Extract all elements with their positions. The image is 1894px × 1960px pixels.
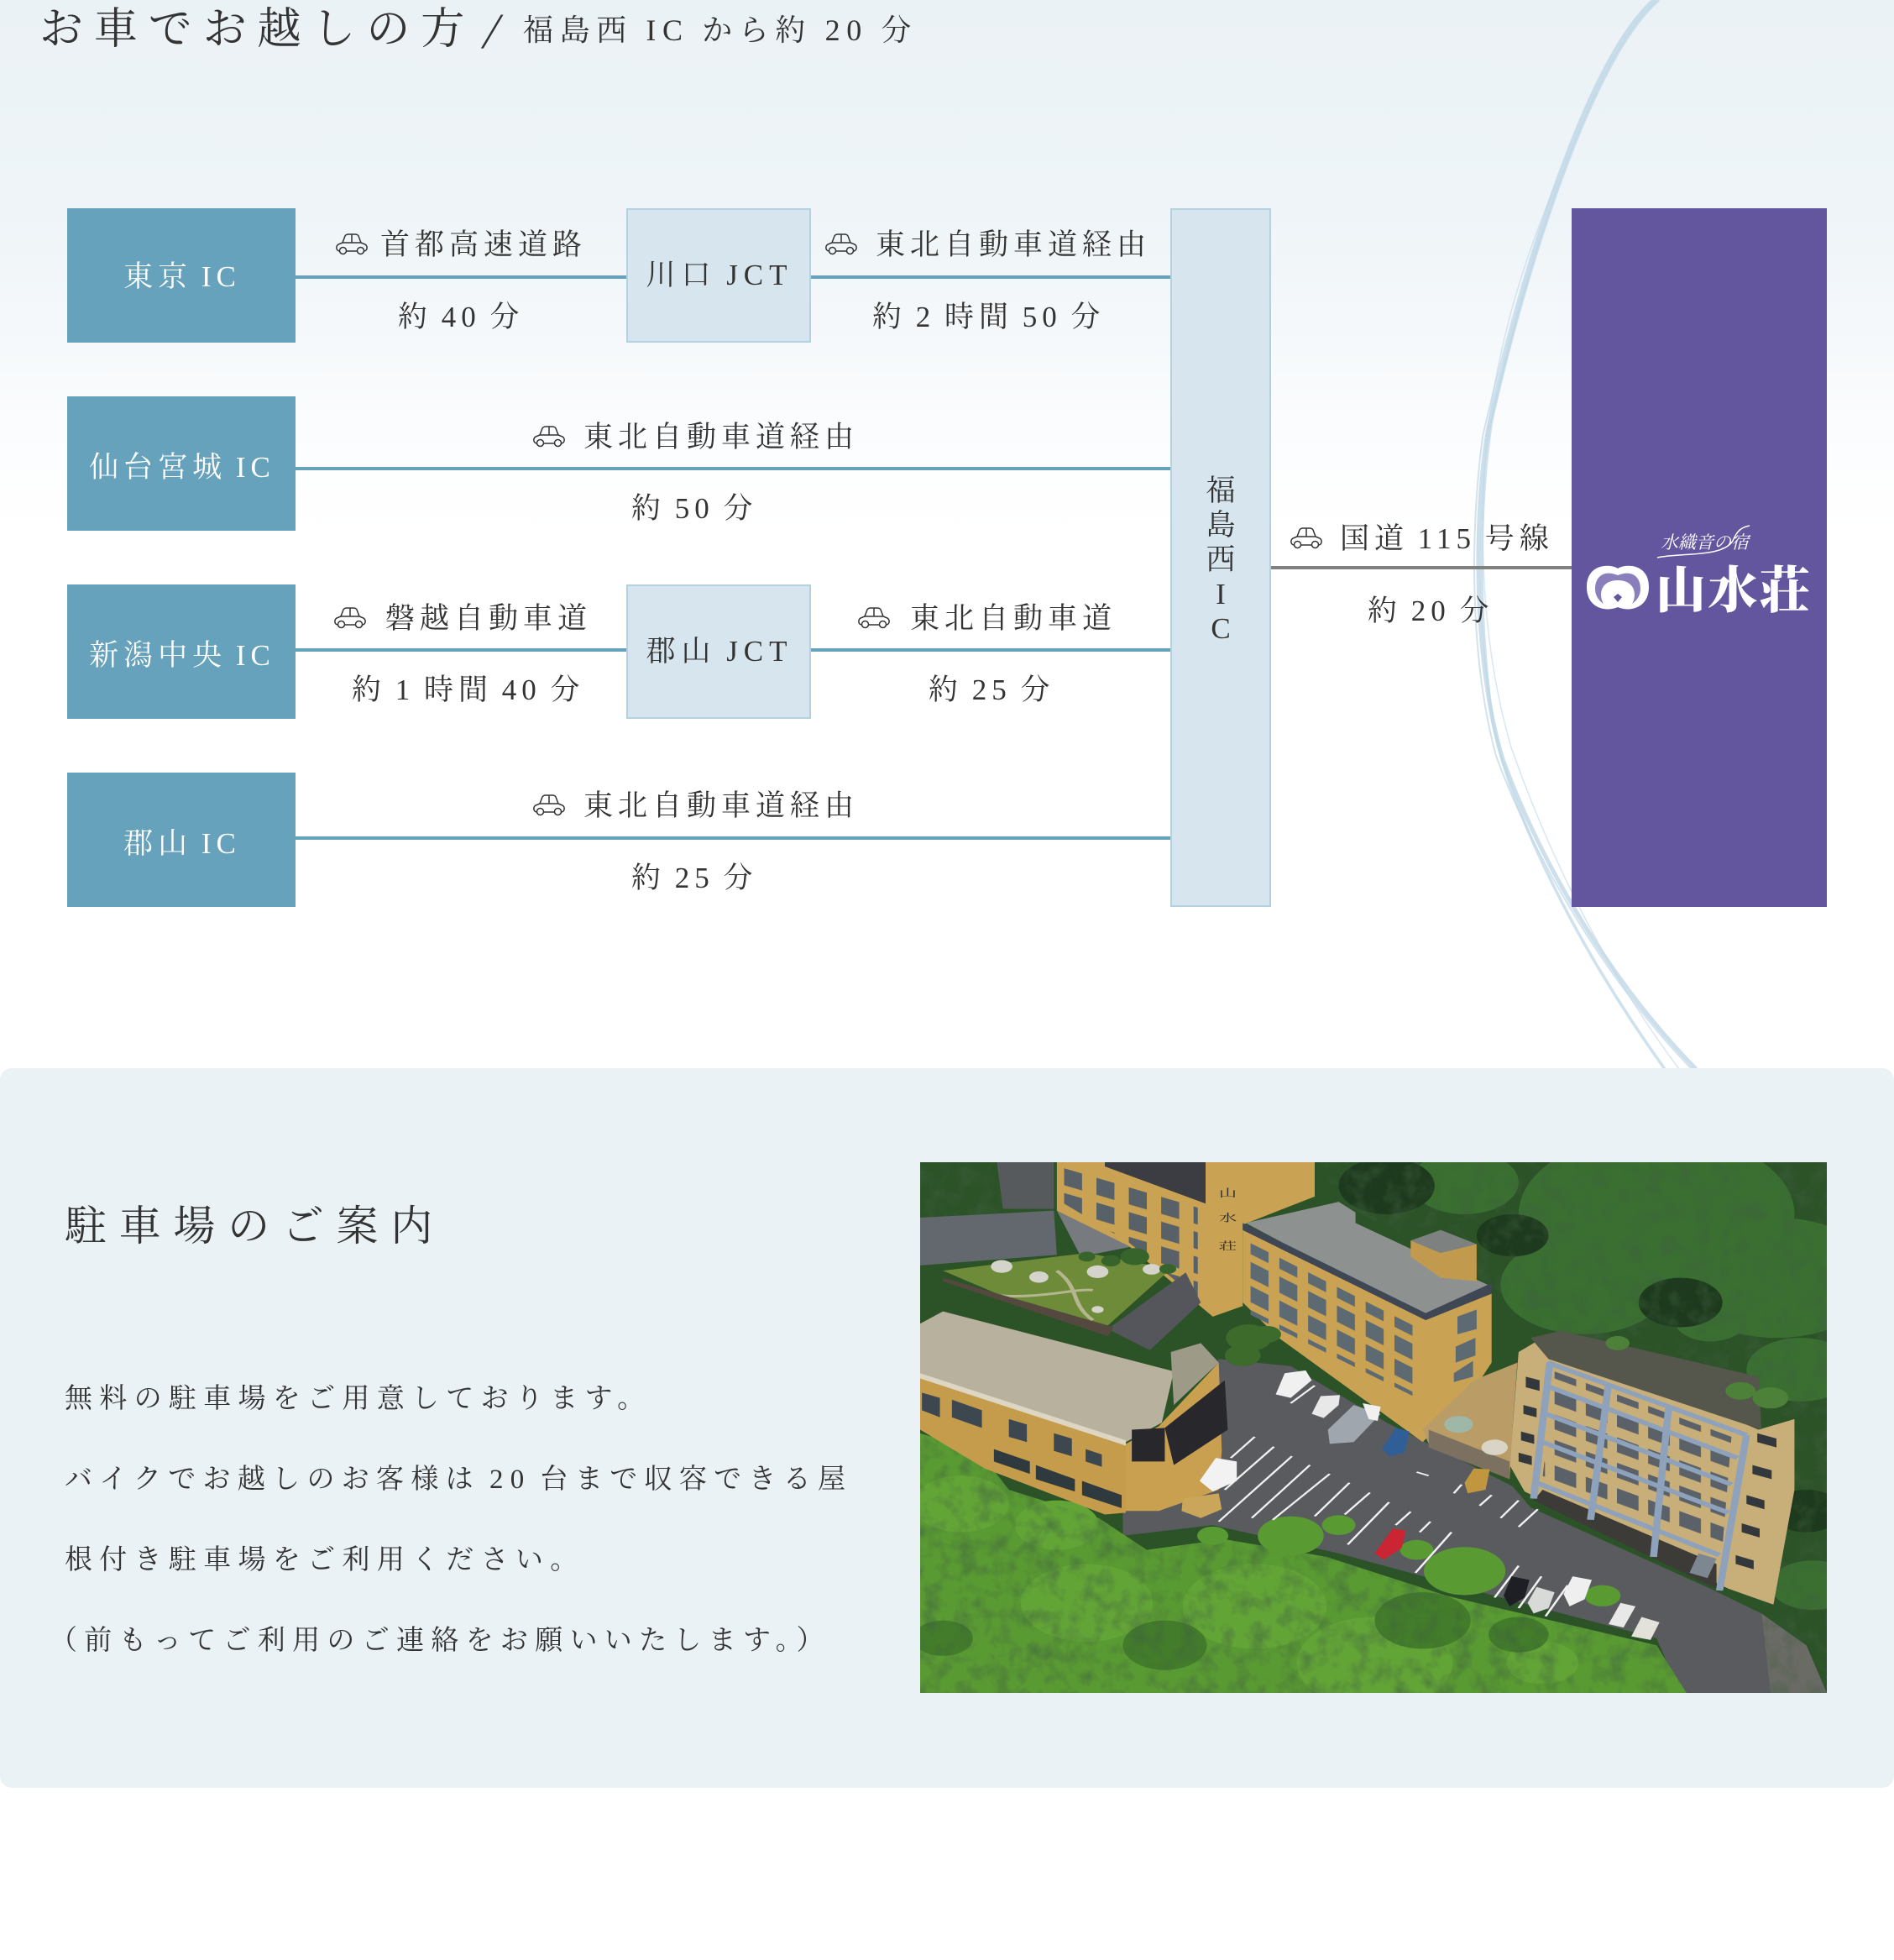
box: 郡山IC: 郡山 IC	[123, 826, 241, 860]
parking lines	[1219, 1386, 1567, 1617]
panel: parking	[0, 1068, 1894, 1788]
box: 仙台宮城IC	[67, 396, 296, 531]
forest canopy shadows	[913, 1592, 1549, 1670]
box: 福島西IC: 島	[1206, 509, 1236, 542]
rooftop garden	[943, 1248, 1176, 1325]
box: 福島西IC	[1170, 208, 1271, 907]
right building	[1509, 1331, 1794, 1605]
body text	[50, 1384, 852, 1656]
top-left small building	[997, 1162, 1054, 1209]
forest right	[1410, 1133, 1878, 1610]
decorative water ribbon curve	[1473, 0, 1698, 1068]
route: 東北自動車道: 東北自動車道	[910, 602, 1117, 635]
foliage texture	[920, 1162, 1827, 1693]
route: 国道115号線: 国道 115 号線	[1340, 522, 1554, 555]
title: お車でお越しの方	[39, 6, 475, 54]
route: 東北自動車道経由 (row 4): 東北自動車道経由	[583, 789, 859, 822]
service block	[1423, 1363, 1517, 1479]
asphalt	[1122, 1359, 1771, 1693]
route: 首都高速道路: 首都高速道路	[380, 228, 587, 261]
dark sloped roof	[1108, 1272, 1201, 1350]
box: 東京IC: 東京 IC	[123, 260, 241, 292]
photo: aerial view of hotel and parking lot	[920, 1162, 1827, 1693]
title: /	[479, 3, 506, 59]
box: 仙台宮城IC: 仙台宮城 IC	[89, 450, 275, 484]
logo tagline: 水織音の宿	[1661, 532, 1749, 553]
time: 約50分: 約 50 分	[631, 492, 758, 525]
logo emblem	[1587, 566, 1649, 610]
parking lot trees	[1197, 1515, 1620, 1606]
box: 新潟中央IC: 新潟中央 IC	[89, 638, 275, 672]
planter wall	[943, 1278, 1114, 1336]
time: 約25分 (row 4): 約 25 分	[631, 862, 758, 894]
logo wordmark: 山水荘	[1656, 551, 1812, 623]
road verge bottom right	[1761, 1613, 1827, 1693]
body text: （前もってご利用のご連絡をお願いいたします。）	[50, 1626, 831, 1656]
body text: バイクでお越しのお客様は 20 台まで収容できる屋	[65, 1465, 852, 1495]
panel: destination logo	[1572, 208, 1827, 907]
box: 郡山JCT	[626, 584, 811, 719]
box: 福島西IC: 西	[1206, 543, 1236, 576]
heading: parking: 駐車場のご案内	[65, 1203, 445, 1250]
body text: 根付き駐車場をご利用ください。	[65, 1545, 584, 1575]
body text: 無料の駐車場をご用意しております。	[65, 1384, 651, 1414]
grey roof top left	[920, 1211, 1057, 1266]
left building	[920, 1312, 1227, 1518]
courtyard shrubs	[1225, 1324, 1281, 1366]
main tower: 荘	[1219, 1239, 1237, 1252]
main tower: 山	[1219, 1187, 1237, 1199]
main tower: 水	[1219, 1212, 1237, 1224]
route: 磐越自動車道: 磐越自動車道	[385, 602, 592, 635]
box: 福島西IC: C	[1211, 612, 1231, 645]
box: 新潟中央IC	[67, 584, 296, 719]
cars	[1200, 1370, 1717, 1640]
main tower	[1057, 1162, 1315, 1317]
wing	[1243, 1202, 1492, 1442]
time: 約40分: 約 40 分	[398, 301, 525, 333]
time: 約2時間50分: 約 2 時間 50 分	[872, 301, 1106, 333]
side roof	[1057, 1211, 1135, 1256]
forest canopy highlights	[913, 1475, 1578, 1709]
box: 川口JCT	[626, 208, 811, 343]
box: 東京IC	[67, 208, 296, 343]
title: 福島西 IC から約 20 分	[523, 13, 918, 47]
time: 約1時間40分: 約 1 時間 40 分	[352, 673, 585, 706]
forest shadows	[1339, 1158, 1843, 1533]
box: 福島西IC: 福	[1206, 474, 1236, 507]
route: 東北自動車道経由 (row 1): 東北自動車道経由	[876, 228, 1151, 261]
box: 川口JCT: 川口 JCT	[646, 259, 793, 291]
box: 福島西IC: I	[1216, 578, 1226, 611]
box: 郡山JCT: 郡山 JCT	[646, 635, 793, 668]
time: 約25分 (row 3): 約 25 分	[929, 673, 1055, 706]
route: 東北自動車道経由 (row 2): 東北自動車道経由	[583, 421, 859, 453]
connector lines	[296, 275, 1572, 840]
title	[39, 3, 918, 59]
time: 約20分: 約 20 分	[1368, 595, 1494, 627]
logo swoosh	[1657, 525, 1750, 558]
box: 郡山IC	[67, 773, 296, 907]
green forest	[920, 1433, 1687, 1693]
